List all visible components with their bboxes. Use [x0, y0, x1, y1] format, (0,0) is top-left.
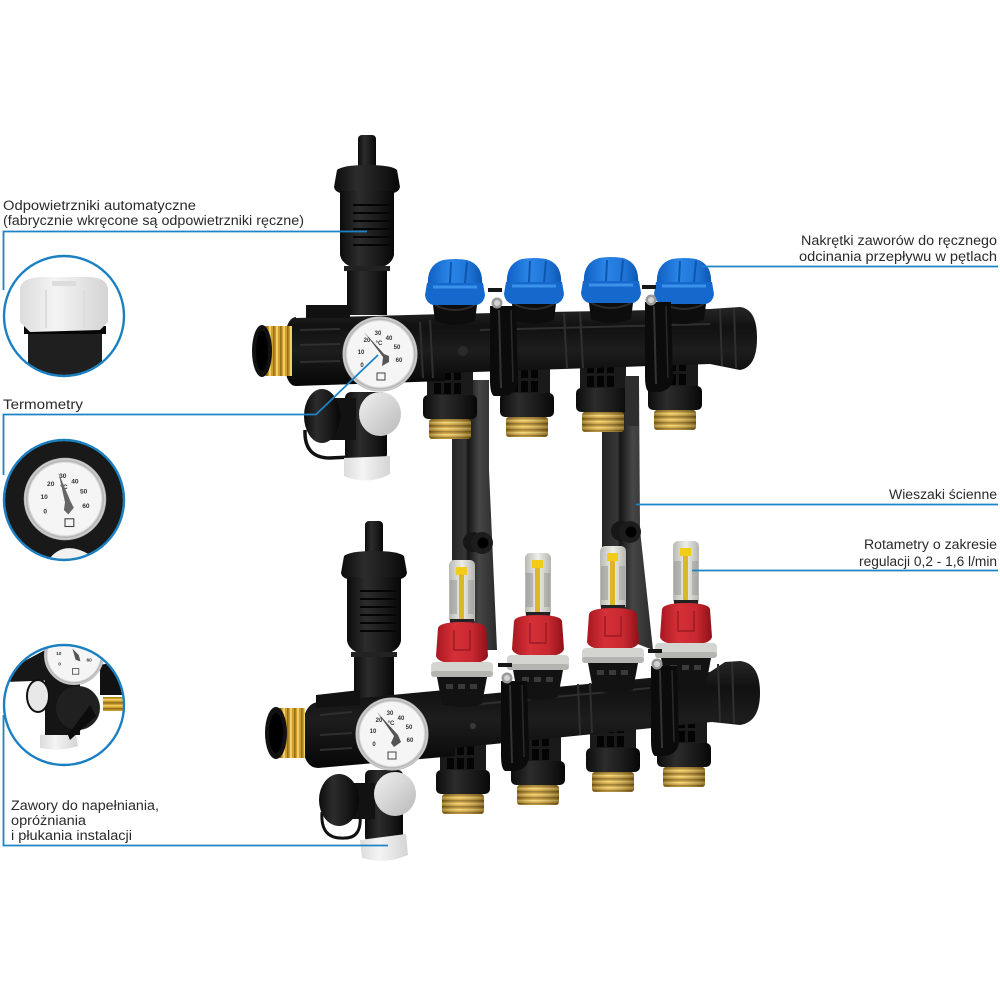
bottom thermometer: 0	[372, 742, 376, 748]
product infographic	[2, 135, 998, 861]
inset circle: thermometer: 10	[40, 494, 48, 501]
bottom thermometer: °C	[388, 721, 395, 727]
callout: thermometers	[3, 355, 378, 475]
bottom filling valve	[319, 770, 416, 861]
inset circle: thermometer: 40	[71, 479, 79, 486]
bottom left brass connector	[265, 707, 305, 759]
top thermometer: 60	[396, 358, 403, 364]
inset circle: thermometer: °C	[60, 483, 68, 491]
inset circle: thermometer: 0	[43, 508, 47, 515]
top thermometer: 10	[358, 350, 365, 356]
top manifold body	[284, 305, 757, 386]
top thermometer: 20	[364, 338, 371, 344]
callout: filling valves: opróżniania	[11, 813, 87, 828]
top left brass connector	[252, 325, 292, 377]
callout: valve nuts: Nakrętki zaworów do ręcznego	[801, 233, 997, 248]
callout: filling valves: Zawory do napełniania,	[11, 798, 159, 813]
top manifold outlets	[423, 356, 702, 439]
callout: thermometers: Termometry	[3, 397, 83, 412]
inset circle: manual air vent	[4, 256, 124, 381]
bottom manifold body	[302, 661, 760, 768]
callout: air vents: (fabrycznie wkręcone są odpowietrzniki ręczne)	[3, 213, 304, 228]
inset circle: filling valve	[2, 644, 126, 766]
callout: valve nuts	[702, 233, 998, 266]
callout: air vents: Odpowietrzniki automatyczne	[3, 198, 196, 213]
bottom thermometer: 40	[398, 716, 405, 722]
inset circle: filling valve: 10	[56, 651, 62, 657]
inset circle: filling valve: 0	[58, 661, 61, 667]
callout: rotameters: Rotametry o zakresie	[864, 537, 997, 552]
red rotameters	[431, 541, 717, 707]
bottom air vent	[341, 521, 407, 701]
top thermometer: °C	[376, 341, 383, 347]
callout: filling valves: i płukania instalacji	[11, 828, 132, 843]
bottom thermometer: 60	[407, 738, 414, 744]
top thermometer: 40	[386, 336, 393, 342]
inset circle: thermometer: 20	[47, 481, 55, 488]
top air vent	[334, 135, 400, 315]
wall hangers	[452, 380, 653, 650]
inset circle: filling valve: 60	[87, 657, 92, 663]
bottom thermometer: 50	[406, 725, 413, 731]
top blue valve caps	[425, 257, 714, 325]
bottom clamps	[498, 649, 679, 771]
top thermometer	[343, 317, 417, 391]
inset circle: thermometer	[4, 440, 124, 565]
bottom thermometer: 10	[370, 729, 377, 735]
callout: rotameters: regulacji 0,2 - 1,6 l/min	[859, 554, 997, 569]
callout: air vents	[3, 198, 367, 290]
inset circle: thermometer: 30	[59, 473, 67, 480]
top filling valve	[304, 389, 401, 481]
top thermometer: 50	[394, 345, 401, 351]
callout: filling valves	[4, 715, 388, 846]
top clamps	[488, 285, 673, 396]
inset circle: thermometer: 60	[82, 503, 90, 510]
top thermometer: 0	[360, 363, 364, 369]
bottom thermometer: 30	[387, 711, 394, 717]
callout: rotameters	[692, 537, 998, 570]
bottom manifold outlets	[436, 713, 711, 814]
bottom thermometer	[356, 698, 428, 770]
inset circle: thermometer: 50	[80, 489, 88, 496]
top thermometer: 30	[375, 331, 382, 337]
callout: valve nuts: odcinania przepływu w pętlach	[799, 249, 997, 264]
bottom thermometer: 20	[376, 718, 383, 724]
callout: wall hangers: Wieszaki ścienne	[889, 487, 997, 502]
